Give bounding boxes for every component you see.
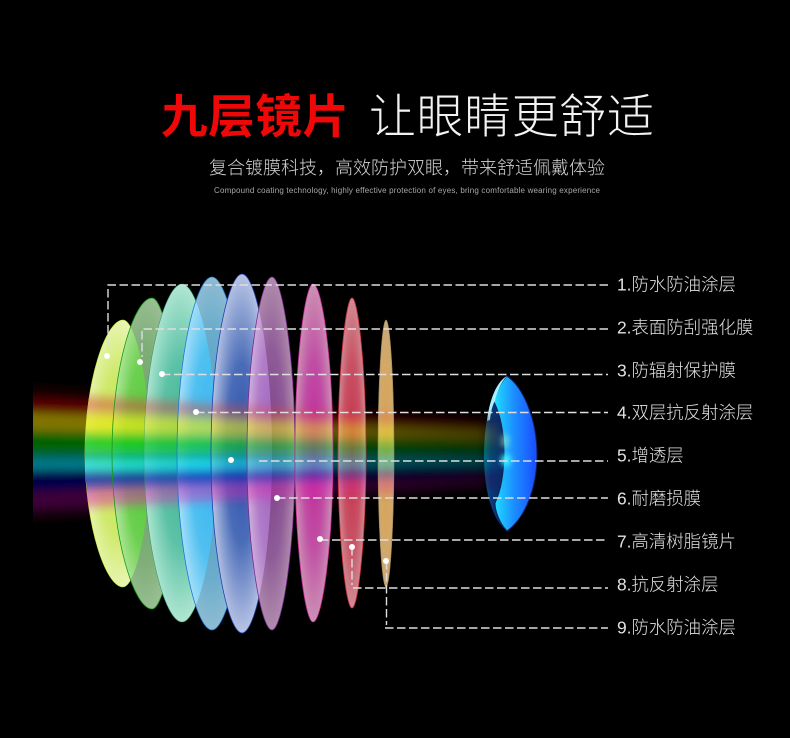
label 4: 4.双层抗反射涂层 bbox=[617, 402, 753, 422]
lens 5 bbox=[210, 274, 259, 634]
lens 9 bbox=[378, 320, 394, 588]
leader lines and dots bbox=[104, 285, 608, 628]
lens 7 bbox=[294, 284, 334, 622]
layer labels bbox=[617, 274, 753, 638]
leader 7 bbox=[317, 536, 608, 542]
lens 3 bbox=[144, 284, 196, 622]
leader 2 bbox=[137, 329, 608, 365]
leader 9 bbox=[383, 558, 608, 628]
english caption: Compound coating technology, highly effective protection of eyes, bring comfortable wearing experience bbox=[214, 186, 601, 195]
label 8: 8.抗反射涂层 bbox=[617, 574, 718, 594]
leader 5 bbox=[228, 457, 608, 463]
subtitle: 复合镀膜科技，高效防护双眼，带来舒适佩戴体验 bbox=[209, 158, 605, 178]
eye: highlight rim bbox=[487, 376, 507, 421]
light beam: dim section bbox=[20, 384, 500, 522]
eye: inner cavity bbox=[484, 376, 512, 531]
lens stack bbox=[84, 274, 394, 634]
leader 8 bbox=[349, 544, 608, 588]
leader 4 bbox=[193, 409, 608, 415]
label 1: 1.防水防油涂层 bbox=[617, 274, 736, 294]
lens 1 bbox=[84, 320, 130, 588]
title bbox=[161, 90, 654, 143]
label 5: 5.增透层 bbox=[617, 446, 684, 466]
title: red part: 九层镜片 bbox=[161, 91, 349, 143]
title: white part: 让眼睛更舒适 bbox=[369, 90, 654, 143]
lens 4 bbox=[176, 276, 228, 630]
eye: cyan flare bbox=[501, 434, 511, 466]
lens 8 bbox=[338, 298, 366, 608]
label 9: 9.防水防油涂层 bbox=[617, 618, 736, 638]
label 7: 7.高清树脂镜片 bbox=[617, 532, 736, 552]
label 2: 2.表面防刮强化膜 bbox=[617, 318, 753, 338]
leader 3 bbox=[159, 371, 608, 377]
lens 2 bbox=[112, 298, 162, 610]
leader 1 bbox=[104, 285, 608, 359]
icon: eye cornea bbox=[484, 376, 537, 531]
leader 6 bbox=[274, 495, 608, 501]
eye: blue crescent bbox=[494, 376, 537, 531]
label 3: 3.防辐射保护膜 bbox=[617, 360, 736, 380]
label 6: 6.耐磨损膜 bbox=[617, 488, 701, 508]
lens 6 bbox=[246, 276, 295, 630]
